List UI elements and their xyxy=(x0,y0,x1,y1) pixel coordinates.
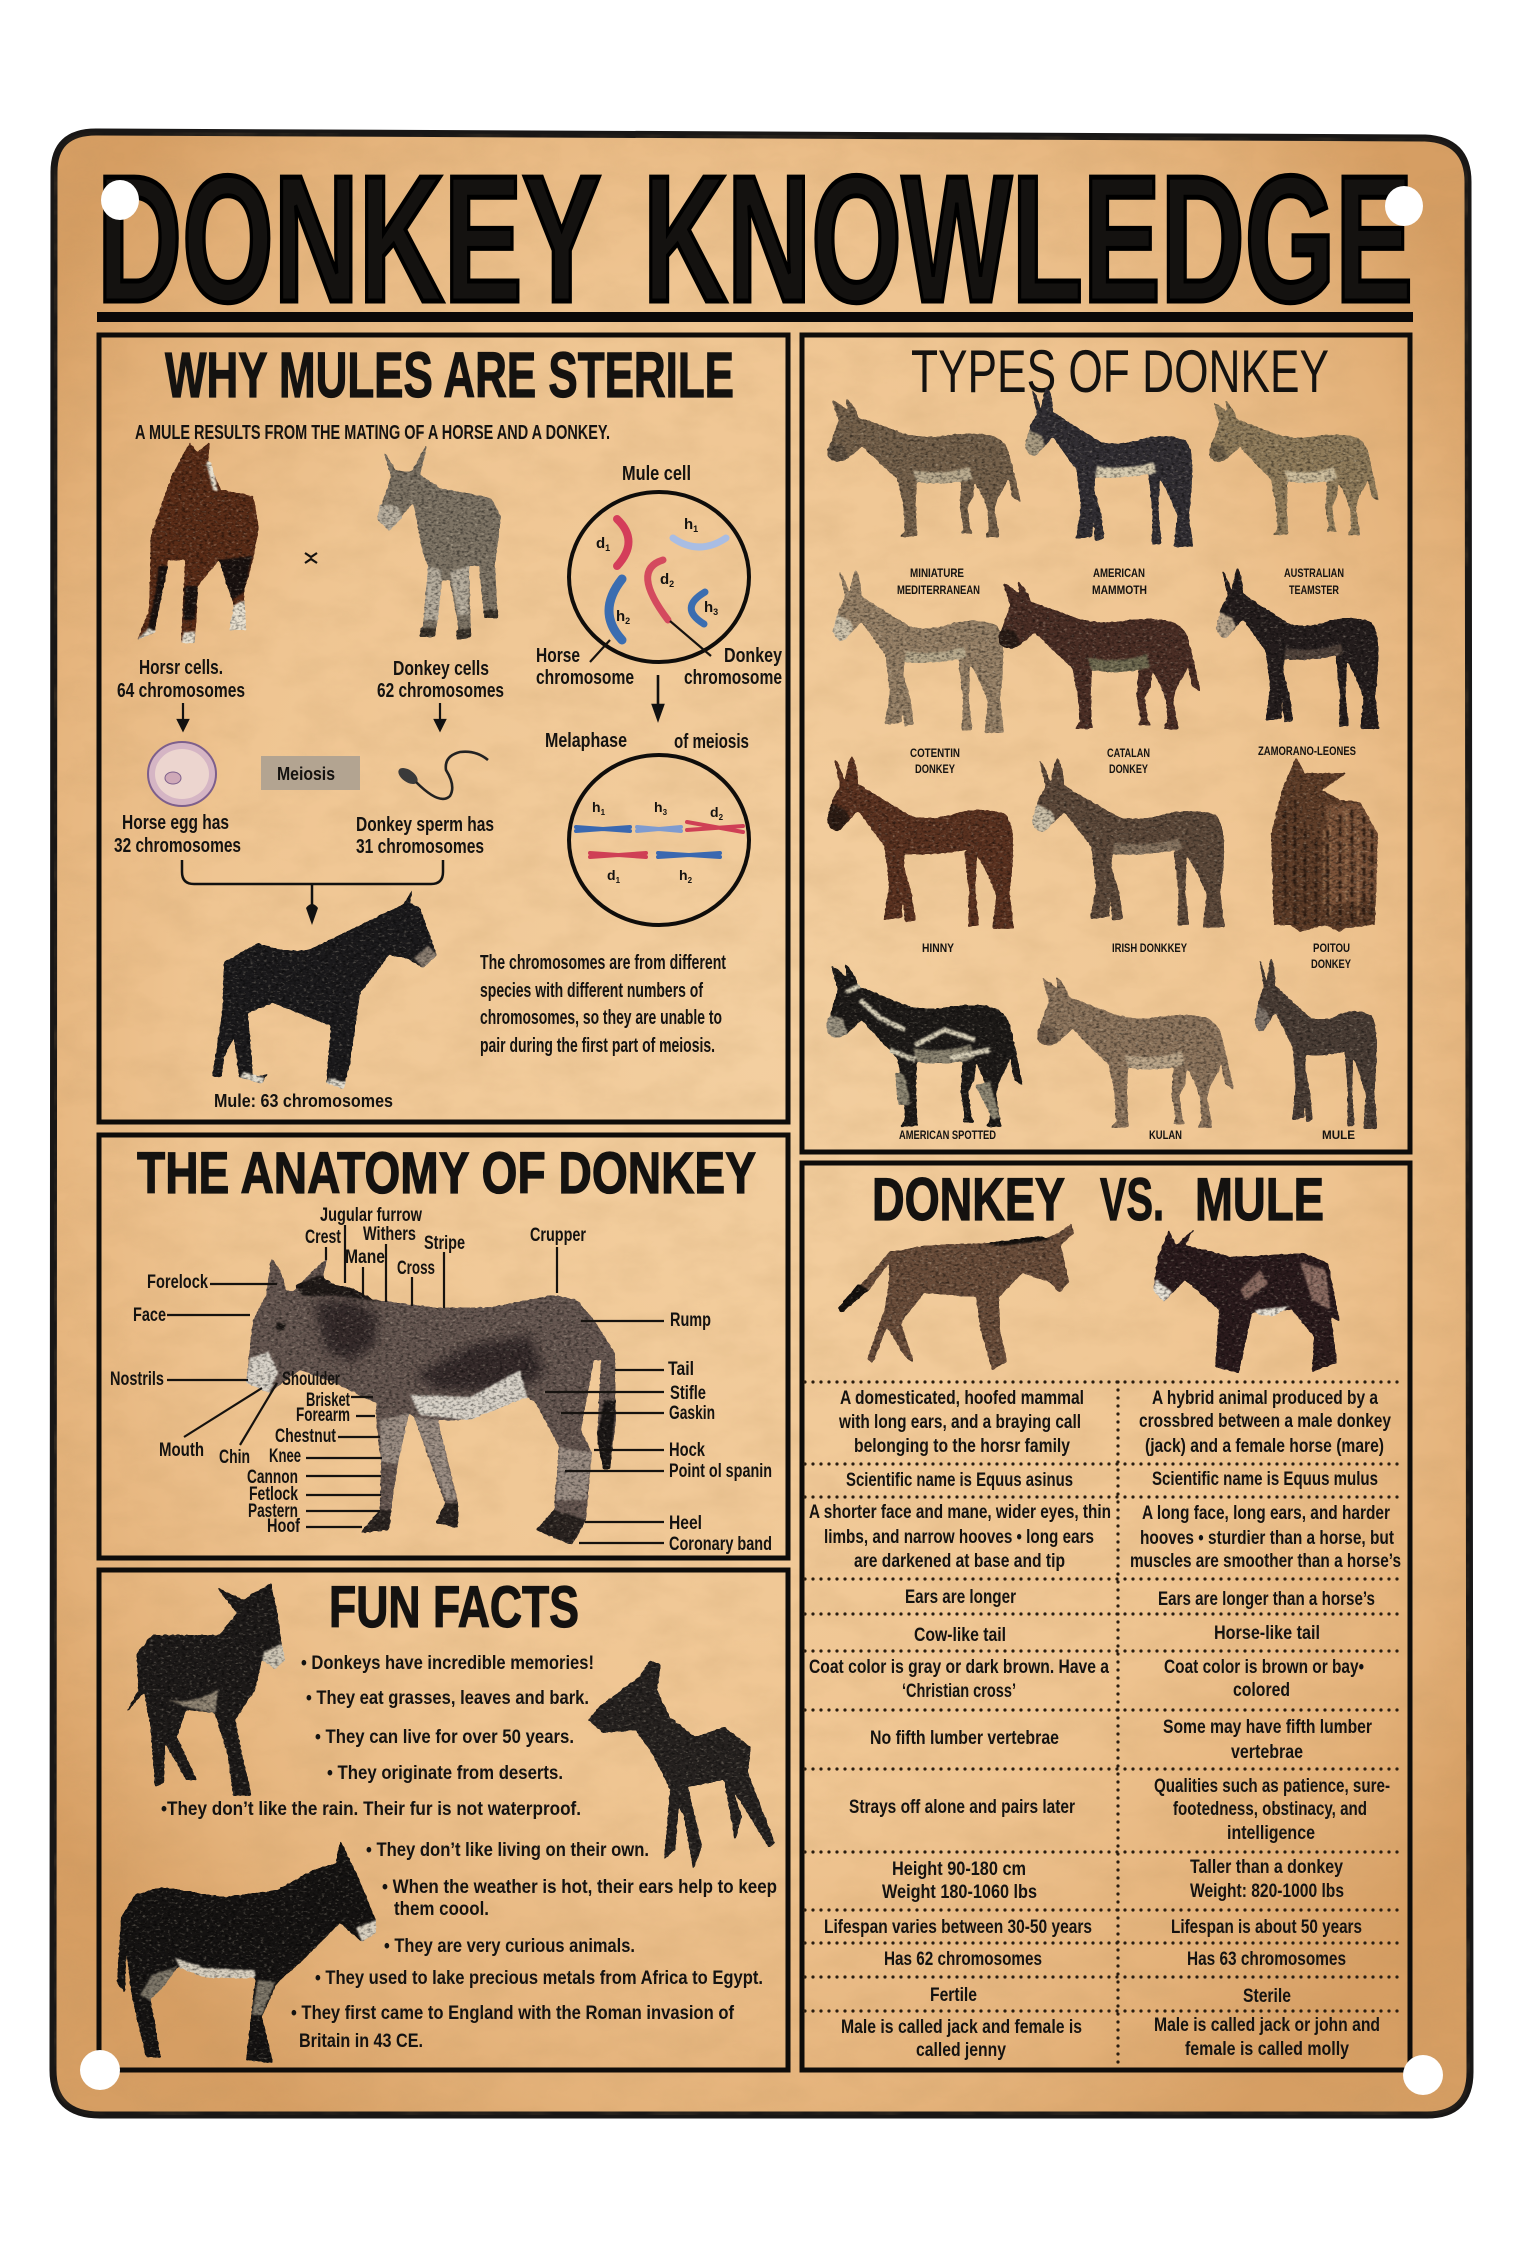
fun fact list: Britain in 43 CE. xyxy=(299,2030,423,2052)
label: horse egg: Horse egg has xyxy=(122,812,229,834)
diagram: metaphase cell: 2 xyxy=(688,876,693,885)
illustration: mule xyxy=(212,888,437,1089)
comparison grid xyxy=(805,1382,1405,2064)
label: horse cells: Horsr cells. xyxy=(139,657,223,679)
bracket arrow xyxy=(182,860,443,925)
caption: hinny: HINNY xyxy=(922,943,954,955)
caption: zamorano-leones: ZAMORANO-LEONES xyxy=(1258,746,1356,758)
anatomy labels: Point ol spanin xyxy=(669,1461,772,1482)
explanation text: chromosomes, so they are unable to xyxy=(480,1007,722,1029)
column: mule traits: Coat color is brown or bay• xyxy=(1164,1657,1364,1678)
anatomy labels: Tail xyxy=(668,1359,694,1380)
donkey: miniature mediterranean xyxy=(827,398,1021,537)
column: mule traits: crossbred between a male donkey xyxy=(1139,1411,1391,1432)
caption: catalan: DONKEY xyxy=(1109,764,1148,776)
column: mule traits: Has 63 chromosomes xyxy=(1187,1949,1346,1970)
heading: anatomy of donkey: THE ANATOMY OF DONKEY xyxy=(137,1141,756,1206)
diagram: mule cell: h xyxy=(616,608,625,625)
label: mule cell: Mule cell xyxy=(622,463,691,485)
column: donkey traits: A shorter face and mane, wider eyes, thin xyxy=(809,1502,1111,1523)
column: donkey traits: called jenny xyxy=(916,2040,1006,2061)
diagram: mule cell: 2 xyxy=(669,579,674,589)
label: metaphase of meiosis xyxy=(545,730,749,753)
anatomy labels: Cross xyxy=(397,1258,435,1279)
label: donkey cells xyxy=(377,658,504,702)
column: donkey traits: Coat color is gray or dark brown. Have a xyxy=(809,1657,1109,1678)
illustration: brown donkey xyxy=(838,1223,1074,1370)
illustration: donkey bottom-left xyxy=(117,1840,376,2063)
column: donkey traits: A domesticated, hoofed mammal xyxy=(840,1388,1084,1409)
diagram: mule cell: h xyxy=(684,516,693,533)
cross symbol xyxy=(305,553,317,563)
fun fact list xyxy=(161,1652,777,2052)
panel: fun facts xyxy=(99,1570,788,2070)
column: donkey traits: belonging to the horsr family xyxy=(854,1436,1070,1457)
label: donkey cells: Donkey cells xyxy=(393,658,489,680)
heading: donkey vs mule: VS. xyxy=(1100,1166,1164,1233)
column: donkey traits: with long ears, and a braying call xyxy=(838,1412,1081,1433)
panel: why mules are sterile xyxy=(99,335,788,1122)
label: donkey cells: 62 chromosomes xyxy=(377,680,504,702)
donkey: poitou xyxy=(1271,757,1378,932)
anatomy labels: Jugular furrow xyxy=(320,1205,422,1226)
label: horse egg xyxy=(114,812,241,857)
fun fact list: • They originate from deserts. xyxy=(327,1762,563,1784)
label: donkey sperm xyxy=(356,814,494,858)
anatomy labels: Chestnut xyxy=(275,1426,336,1447)
anatomy labels: Heel xyxy=(669,1513,702,1534)
column: mule traits: Qualities such as patience, sure- xyxy=(1154,1776,1390,1797)
arrow: horse to egg xyxy=(178,703,188,730)
explanation text: The chromosomes are from different xyxy=(480,952,726,974)
caption: american mammoth xyxy=(1092,568,1147,597)
fun fact list: • They don’t like living on their own. xyxy=(366,1839,649,1861)
column: mule traits: (jack) and a female horse (mare) xyxy=(1145,1436,1384,1457)
fun fact list: • They first came to England with the Roman invasion of xyxy=(291,2002,734,2024)
anatomy labels: Nostrils xyxy=(110,1369,164,1390)
panel: anatomy of donkey xyxy=(99,1135,788,1558)
fun fact list: • They eat grasses, leaves and bark. xyxy=(306,1687,589,1709)
column: mule traits: A long face, long ears, and harder xyxy=(1142,1503,1390,1524)
diagram: metaphase cell: 2 xyxy=(719,813,724,822)
anatomy labels: Hoof xyxy=(267,1516,301,1537)
label: mule chromosomes: Mule: 63 chromosomes xyxy=(214,1091,393,1111)
icon: donkey sperm xyxy=(396,752,488,799)
column: mule traits: Sterile xyxy=(1243,1986,1291,2007)
panel: donkey vs mule xyxy=(802,1163,1410,2070)
heading: types of donkey: TYPES OF DONKEY xyxy=(911,338,1329,405)
anatomy labels: Shoulder xyxy=(282,1369,340,1390)
diagram: mule cell: d xyxy=(596,535,605,552)
caption: australian teamster: TEAMSTER xyxy=(1289,585,1340,597)
column: donkey traits: Fertile xyxy=(930,1985,977,2006)
caption: american spotted: AMERICAN SPOTTED xyxy=(899,1130,996,1142)
column: donkey traits: Scientific name is Equus asinus xyxy=(846,1470,1073,1491)
mounting holes xyxy=(80,180,1443,2095)
label: horse cells: 64 chromosomes xyxy=(117,680,245,702)
title: DONKEY xyxy=(97,139,601,340)
column: mule traits: Ears are longer than a horse’s xyxy=(1158,1589,1375,1610)
diagram: mule cell: d xyxy=(660,571,669,588)
fun fact list: them coool. xyxy=(394,1898,489,1920)
caption: mule: MULE xyxy=(1322,1130,1355,1142)
column: mule traits: Some may have fifth lumber xyxy=(1163,1717,1372,1738)
diagram: mule cell: 1 xyxy=(693,524,698,534)
anatomy labels: Mane xyxy=(345,1247,385,1268)
diagram: mule cell xyxy=(569,492,749,662)
donkey: american spotted xyxy=(826,963,1023,1127)
donkey: kulan xyxy=(1037,976,1234,1128)
arrow: donkey to sperm xyxy=(435,703,445,730)
column: mule traits: A hybrid animal produced by a xyxy=(1152,1388,1378,1409)
diagram: mule cell: 2 xyxy=(625,616,630,626)
pointer lines xyxy=(167,1225,664,1543)
diagram: metaphase cell: h xyxy=(679,867,688,883)
donkey: american mammoth xyxy=(1025,385,1193,547)
anatomy labels: Pastern xyxy=(248,1501,298,1522)
label: metaphase of meiosis: Melaphase xyxy=(545,730,627,752)
column: mule traits: muscles are smoother than a horse’s xyxy=(1130,1551,1401,1572)
anatomy labels: Crest xyxy=(305,1227,341,1248)
diagram: metaphase cell: d xyxy=(607,867,616,883)
icon: horse egg xyxy=(148,742,216,806)
column: mule traits: Weight: 820-1000 lbs xyxy=(1190,1881,1344,1902)
anatomy labels xyxy=(110,1205,772,1555)
heading: donkey vs mule: MULE xyxy=(1195,1166,1324,1233)
caption: poitou: POITOU xyxy=(1313,943,1350,955)
column: donkey traits: Height 90-180 cm xyxy=(892,1859,1026,1880)
heading: fun facts: FUN FACTS xyxy=(329,1575,579,1640)
title xyxy=(97,139,1413,340)
donkey: zamorano-leones xyxy=(1216,567,1379,729)
panel: types of donkey xyxy=(802,335,1410,1152)
column: mule traits: female is called molly xyxy=(1185,2039,1349,2060)
caption: poitou xyxy=(1311,943,1351,971)
caption: miniature mediterranean xyxy=(897,568,980,597)
caption: american mammoth: AMERICAN xyxy=(1093,568,1145,580)
caption: miniature mediterranean: MINIATURE xyxy=(910,568,964,580)
anatomy labels: Fetlock xyxy=(249,1484,298,1505)
intro text: A MULE RESULTS FROM THE MATING OF A HORSE AND A DONKEY. xyxy=(135,422,610,444)
caption: poitou: DONKEY xyxy=(1311,959,1351,971)
diagram: metaphase cell: 1 xyxy=(616,876,621,885)
heading: donkey vs mule: DONKEY xyxy=(872,1166,1065,1233)
illustration: dark mule xyxy=(1153,1228,1340,1373)
explanation text xyxy=(480,952,726,1057)
column: mule traits: intelligence xyxy=(1227,1823,1315,1844)
caption: catalan xyxy=(1107,748,1150,776)
fun fact list: • They can live for over 50 years. xyxy=(315,1726,574,1748)
caption: cotentin: COTENTIN xyxy=(910,748,960,760)
label: donkey chromosome xyxy=(684,645,783,689)
heading: donkey vs mule xyxy=(872,1166,1324,1233)
label: donkey sperm: Donkey sperm has xyxy=(356,814,494,836)
column: mule traits: Scientific name is Equus mulus xyxy=(1152,1469,1378,1490)
column: donkey traits: Lifespan varies between 30-50 years xyxy=(824,1917,1092,1938)
donkey: mule type xyxy=(1255,957,1377,1129)
fun fact list: • When the weather is hot, their ears help to keep xyxy=(382,1876,777,1898)
column: donkey traits: Has 62 chromosomes xyxy=(884,1949,1042,1970)
donkey: cotentin xyxy=(833,569,1004,733)
anatomy labels: Mouth xyxy=(159,1440,204,1461)
anatomy labels: Brisket xyxy=(306,1390,350,1411)
diagram: metaphase cell: 1 xyxy=(601,808,606,817)
anatomy labels: Stifle xyxy=(670,1383,706,1404)
caption: catalan: CATALAN xyxy=(1107,748,1150,760)
diagram: metaphase cell: h xyxy=(654,799,663,815)
fun fact list: •They don’t like the rain. Their fur is not waterproof. xyxy=(161,1798,581,1820)
label: horse chromosome: chromosome xyxy=(536,667,634,689)
column: donkey traits: Cow-like tail xyxy=(914,1625,1006,1646)
caption: miniature mediterranean: MEDITERRANEAN xyxy=(897,585,980,597)
column: mule traits: footedness, obstinacy, and xyxy=(1173,1799,1367,1820)
column: donkey traits: ‘Christian cross’ xyxy=(902,1681,1016,1702)
column: donkey traits: Male is called jack and female is xyxy=(841,2017,1082,2038)
anatomy labels: Stripe xyxy=(424,1233,465,1254)
caption: kulan: KULAN xyxy=(1149,1130,1182,1142)
label: horse chromosome xyxy=(536,645,634,689)
donkey: australian teamster xyxy=(1209,400,1379,535)
column: mule traits: hooves • sturdier than a horse, but xyxy=(1140,1528,1395,1549)
diagram: metaphase cell: d xyxy=(710,804,719,820)
anatomy labels: Face xyxy=(133,1305,166,1326)
diagram: mule cell: 3 xyxy=(713,607,718,617)
meiosis label: Meiosis xyxy=(277,764,335,784)
donkey: irish xyxy=(1032,757,1225,928)
column: mule traits: Taller than a donkey xyxy=(1190,1857,1343,1878)
fun fact list: • They are very curious animals. xyxy=(384,1935,635,1957)
illustration: anatomy donkey xyxy=(246,1258,616,1545)
explanation text: species with different numbers of xyxy=(480,980,703,1002)
diagram: metaphase cell: 3 xyxy=(663,808,668,817)
heading: why mules are sterile: WHY MULES ARE STERILE xyxy=(165,339,734,411)
column: donkey traits: are darkened at base and tip xyxy=(854,1551,1065,1572)
diagram: mule cell: 1 xyxy=(605,543,610,553)
meiosis label xyxy=(261,756,360,790)
illustration: foal xyxy=(588,1660,775,1870)
anatomy labels: Hock xyxy=(669,1440,705,1461)
fun fact list: • Donkeys have incredible memories! xyxy=(301,1652,594,1674)
anatomy labels: Crupper xyxy=(530,1225,586,1246)
column: donkey traits: Weight 180-1060 lbs xyxy=(882,1882,1037,1903)
caption: australian teamster xyxy=(1284,568,1344,597)
column: donkey traits: Strays off alone and pairs later xyxy=(849,1797,1075,1818)
column: mule traits: vertebrae xyxy=(1231,1742,1303,1763)
caption: cotentin: DONKEY xyxy=(915,764,955,776)
anatomy labels: Cannon xyxy=(247,1467,298,1488)
caption: cotentin xyxy=(910,748,960,776)
anatomy labels: Forearm xyxy=(296,1405,350,1426)
arrow: mule cell to metaphase xyxy=(653,675,663,719)
caption: australian teamster: AUSTRALIAN xyxy=(1284,568,1344,580)
anatomy labels: Coronary band xyxy=(669,1534,772,1555)
column: donkey traits xyxy=(809,1388,1111,2061)
anatomy labels: Knee xyxy=(269,1446,301,1467)
illustration: grey donkey xyxy=(377,442,501,640)
explanation text: pair during the first part of meiosis. xyxy=(480,1035,715,1057)
diagram: metaphase cell: h xyxy=(592,799,601,815)
column: mule traits: colored xyxy=(1233,1680,1290,1701)
label: horse cells xyxy=(117,657,245,702)
caption: irish donkey: IRISH DONKKEY xyxy=(1112,943,1187,955)
column: mule traits: Horse-like tail xyxy=(1214,1623,1320,1644)
label: donkey chromosome: chromosome xyxy=(684,667,782,689)
anatomy labels: Gaskin xyxy=(669,1403,715,1424)
column: mule traits: Male is called jack or john and xyxy=(1154,2015,1380,2036)
label: donkey sperm: 31 chromosomes xyxy=(356,836,484,858)
label: metaphase of meiosis: of meiosis xyxy=(674,731,749,753)
illustration: horse xyxy=(137,442,259,643)
donkey: catalan xyxy=(998,581,1201,729)
anatomy labels: Forelock xyxy=(147,1272,208,1293)
anatomy labels: Withers xyxy=(363,1224,416,1245)
column: donkey traits: Ears are longer xyxy=(905,1587,1016,1608)
column: donkey traits: limbs, and narrow hooves • long ears xyxy=(824,1527,1094,1548)
illustration: black donkey top-left xyxy=(126,1583,285,1796)
label: horse chromosome: Horse xyxy=(536,645,580,667)
fun fact list: • They used to lake precious metals from Africa to Egypt. xyxy=(315,1967,763,1989)
column: donkey traits: No fifth lumber vertebrae xyxy=(870,1728,1059,1749)
caption: american mammoth: MAMMOTH xyxy=(1092,585,1147,597)
column: mule traits: Lifespan is about 50 years xyxy=(1171,1917,1362,1938)
donkey: hinny xyxy=(827,755,1014,929)
anatomy labels: Chin xyxy=(219,1447,250,1468)
anatomy labels: Rump xyxy=(670,1310,711,1331)
diagram: metaphase cell xyxy=(569,755,749,925)
column: mule traits xyxy=(1130,1388,1401,2060)
label: horse egg: 32 chromosomes xyxy=(114,835,241,857)
label: donkey chromosome: Donkey xyxy=(724,645,783,667)
diagram: mule cell: h xyxy=(704,599,713,616)
